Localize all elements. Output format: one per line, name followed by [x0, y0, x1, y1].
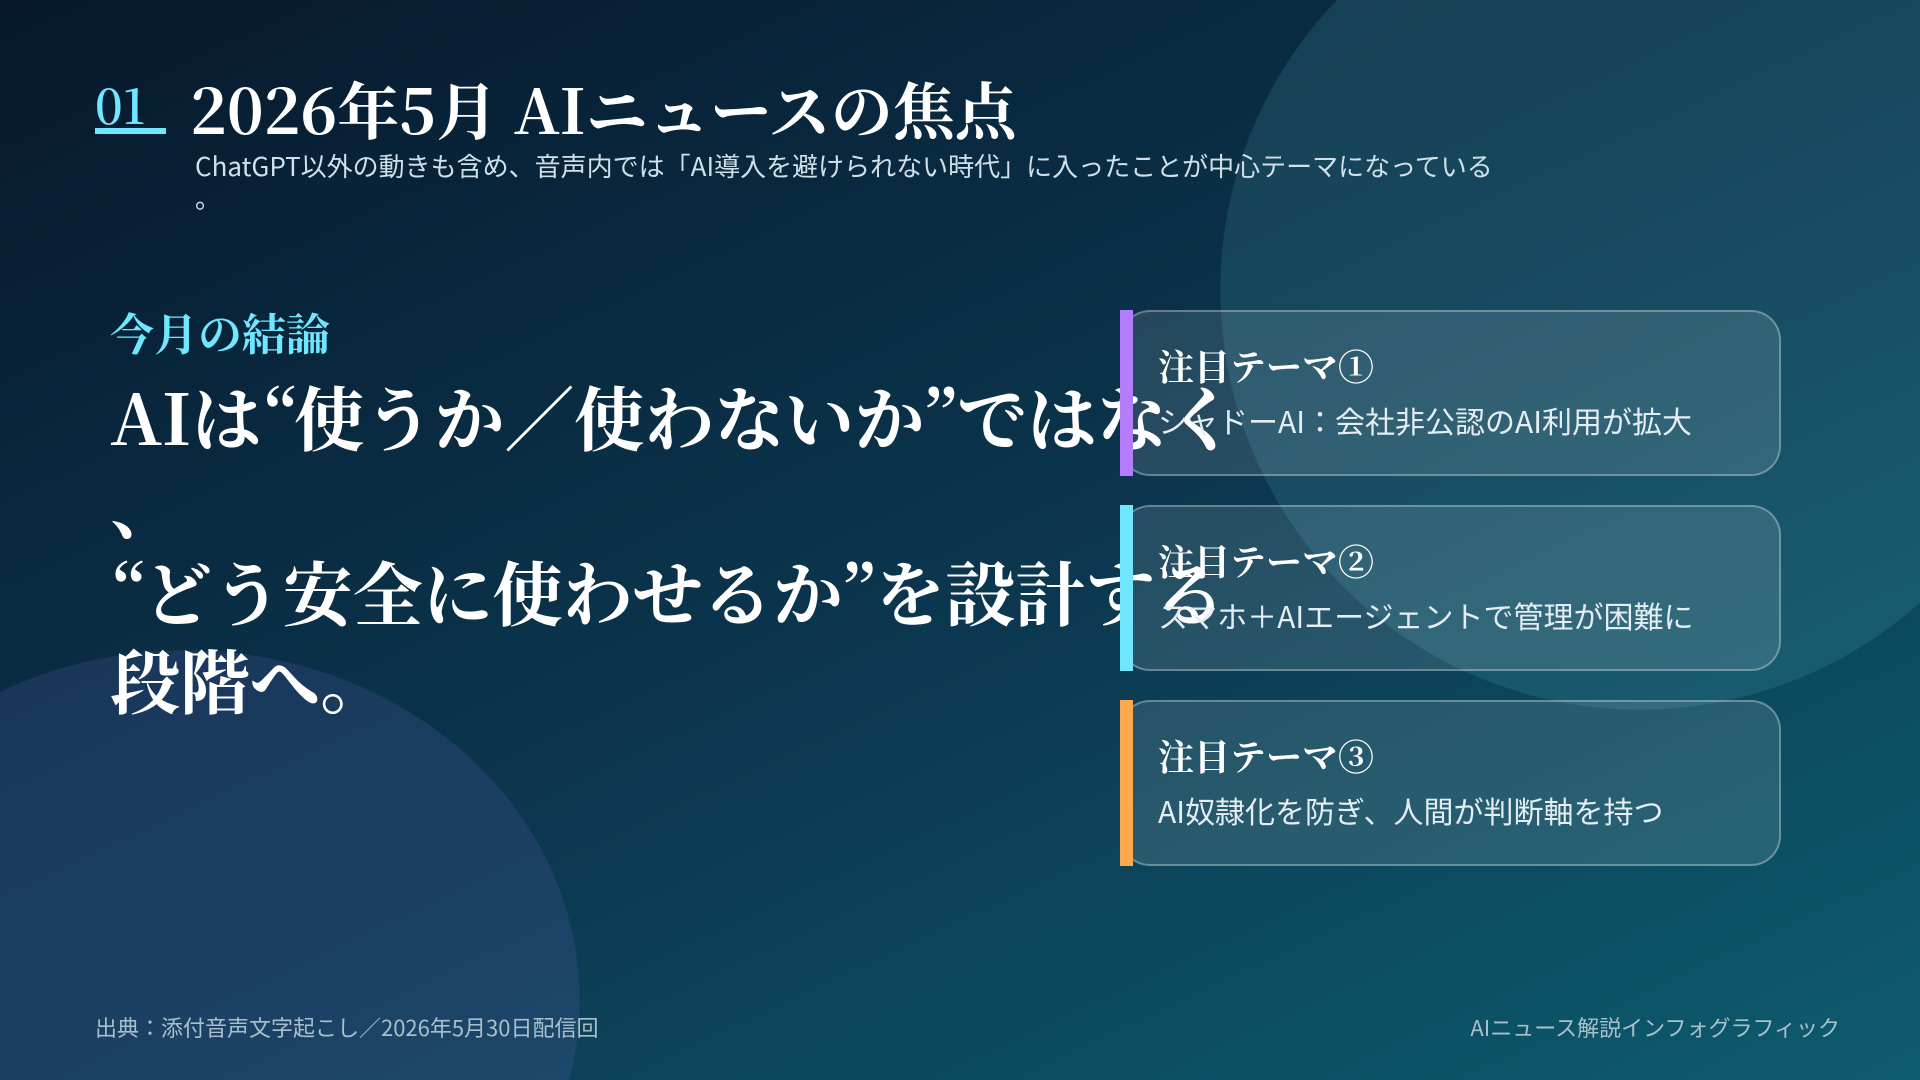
title: 2026年5月 AIニュースの焦点: [190, 63, 1017, 152]
conclusion headline: [110, 365, 1237, 728]
card 2 body: スマホ＋AIエージェントで管理が困難に: [1158, 593, 1694, 637]
section number: [95, 74, 166, 134]
card 3 heading: 注目テーマ③: [1158, 730, 1374, 781]
conclusion headline: AIは“使うか／使わないか”ではなく: [110, 365, 1237, 466]
card 3 accent bar: [1120, 700, 1133, 866]
decorative circle: top right: [1220, 0, 1920, 710]
card 1 body: シャドーAI：会社非公認のAI利用が拡大: [1158, 398, 1692, 442]
subtitle: 。: [195, 179, 221, 216]
decorative circle: bottom left: [0, 650, 580, 1080]
card 3 body: AI奴隷化を防ぎ、人間が判断軸を持つ: [1158, 788, 1664, 832]
subtitle: ChatGPT以外の動きも含め、音声内では「AI導入を避けられない時代」に入ったことが中心テーマになっている: [195, 147, 1493, 184]
conclusion label: 今月の結論: [110, 299, 330, 363]
card 1 heading: 注目テーマ①: [1158, 340, 1374, 391]
footer brand: AIニュース解説インフォグラフィック: [1470, 1011, 1840, 1043]
conclusion headline: 段階へ。: [110, 628, 390, 728]
card 1 accent bar: [1120, 310, 1133, 476]
footer source: 出典：添付音声文字起こし／2026年5月30日配信回: [95, 1011, 598, 1043]
card 2 heading: 注目テーマ②: [1158, 535, 1374, 586]
conclusion headline: 、: [110, 452, 180, 554]
card 2 accent bar: [1120, 505, 1133, 671]
subtitle: [195, 147, 1493, 216]
section number: 01: [95, 69, 145, 138]
card 2: [1120, 505, 1781, 671]
conclusion headline: “どう安全に使わせるか”を設計する: [110, 540, 1225, 641]
card 3: [1120, 700, 1781, 866]
card 1: [1120, 310, 1781, 476]
